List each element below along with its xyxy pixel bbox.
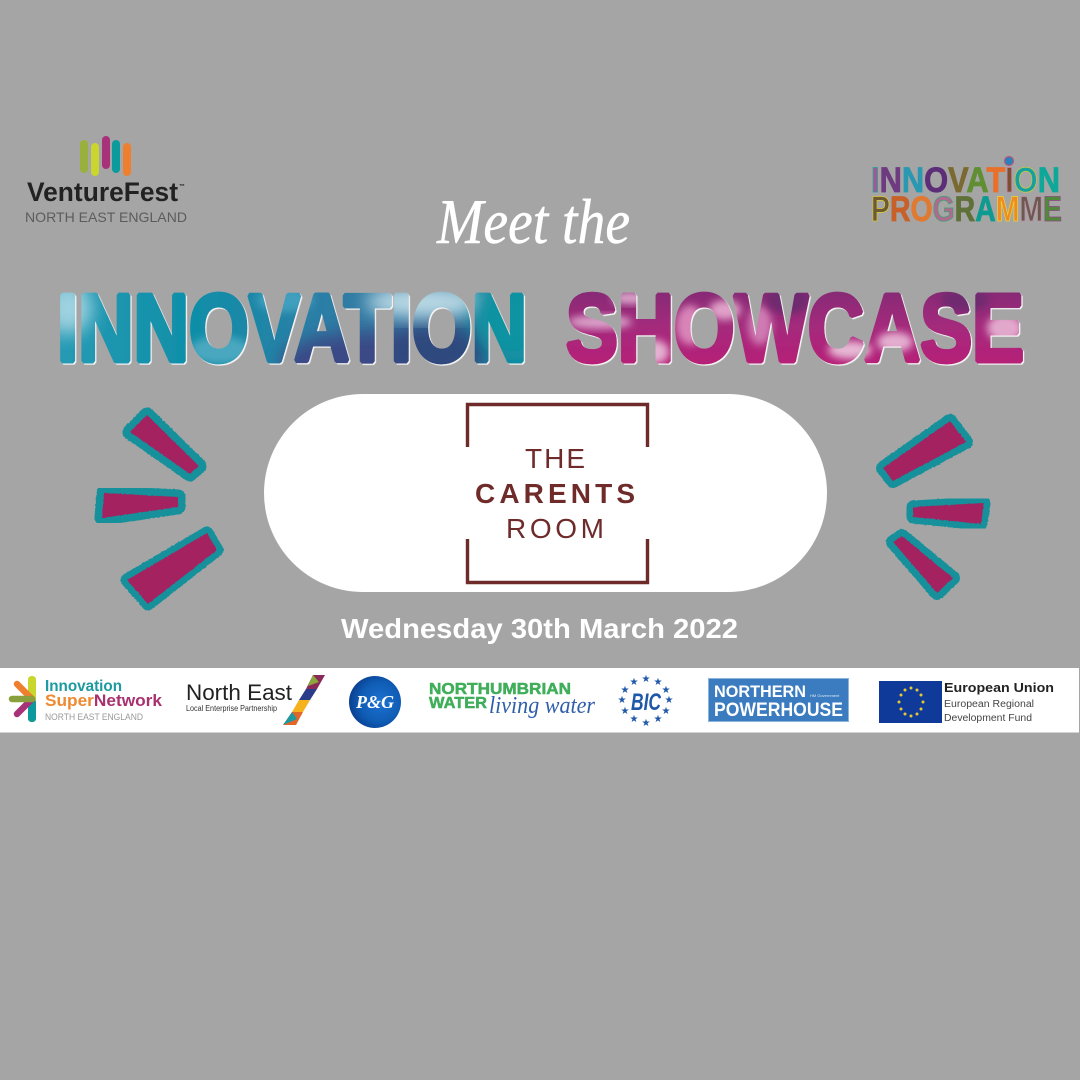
logo: BIC: ★ — [618, 695, 627, 706]
logo: BIC: ★ — [662, 685, 671, 696]
logo: BIC: ★ — [642, 674, 651, 685]
panel: partner logo strip — [0, 668, 1079, 732]
logo: North East LEP: Local Enterprise Partnership — [186, 704, 277, 713]
panel: white pill with The Carents Room logo — [264, 394, 827, 592]
logo: BIC: ★ — [630, 714, 639, 725]
logo: P&amp;G: P&G — [355, 692, 394, 712]
logo: Innovation Programme — [871, 156, 1062, 229]
logo: VentureFest North East England: NORTH EAST ENGLAND — [25, 209, 187, 225]
subtitle: Meet the: Meet the — [436, 186, 630, 257]
logo: VentureFest North East England — [25, 136, 187, 225]
logo: European Union ERDF: European Regional — [944, 699, 1034, 710]
logo: Northern Powerhouse: NORTHERN — [714, 683, 806, 701]
logo: Northumbrian Water: NORTHUMBRIAN — [429, 681, 571, 698]
logo: North East LEP — [186, 675, 325, 725]
logo: VentureFest North East England: VentureFest — [27, 177, 178, 207]
logo text: The Carents Room: CARENTS — [475, 478, 635, 509]
logo: square bracket frame — [468, 404, 648, 582]
logo: Innovation SuperNetwork — [12, 676, 163, 722]
logo text: The Carents Room: THE — [525, 443, 585, 474]
logo: Innovation SuperNetwork: NORTH EAST ENGLAND — [45, 712, 143, 722]
logo text: The Carents Room: ROOM — [506, 513, 604, 544]
logo: BIC: ★ — [621, 706, 630, 717]
logo: BIC: ★ — [662, 706, 671, 717]
icon: EU ring of stars — [898, 686, 924, 718]
logo: P&amp;G — [349, 676, 401, 728]
logo: Innovation SuperNetwork: SuperNetwork — [45, 691, 163, 710]
logo: Northern Powerhouse — [708, 678, 848, 722]
logo: European Union ERDF — [879, 680, 1054, 724]
logo: Northern Powerhouse: HM Government — [810, 693, 840, 698]
logo: Northern Powerhouse: POWERHOUSE — [714, 700, 843, 721]
logo: Northumbrian Water: living water — [489, 693, 596, 719]
title: INNOVATION: INNOVATION — [57, 275, 527, 382]
logo: BIC: ★ — [654, 714, 663, 725]
logo: Innovation SuperNetwork: Innovation — [45, 678, 122, 695]
logo: North East LEP: North East — [186, 680, 292, 705]
logo: Innovation Programme: INNOVATION — [871, 161, 1060, 200]
icon: right burst marks — [883, 421, 984, 593]
logo: BIC: ★ — [665, 695, 674, 706]
date: Wednesday 30th March 2022 — [341, 613, 738, 644]
logo: BIC: ★ — [642, 718, 651, 729]
logo text: The Carents Room — [475, 443, 635, 544]
logo: BIC: BIC — [631, 689, 661, 716]
logo: Northumbrian Water: WATER — [429, 695, 487, 712]
logo: BIC: ★ — [621, 685, 630, 696]
logo: Innovation Programme: PROGRAMME — [871, 190, 1062, 229]
logo: Northumbrian Water — [429, 681, 596, 719]
logo: BIC: ★ — [654, 677, 663, 688]
logo: European Union ERDF: Development Fund — [944, 713, 1032, 724]
logo: VentureFest North East England: ™ — [179, 183, 185, 190]
icon: left burst marks — [102, 415, 217, 604]
logo: BIC: ★ — [630, 677, 639, 688]
logo: BIC — [618, 674, 674, 729]
logo: European Union ERDF: European Union — [944, 680, 1054, 695]
